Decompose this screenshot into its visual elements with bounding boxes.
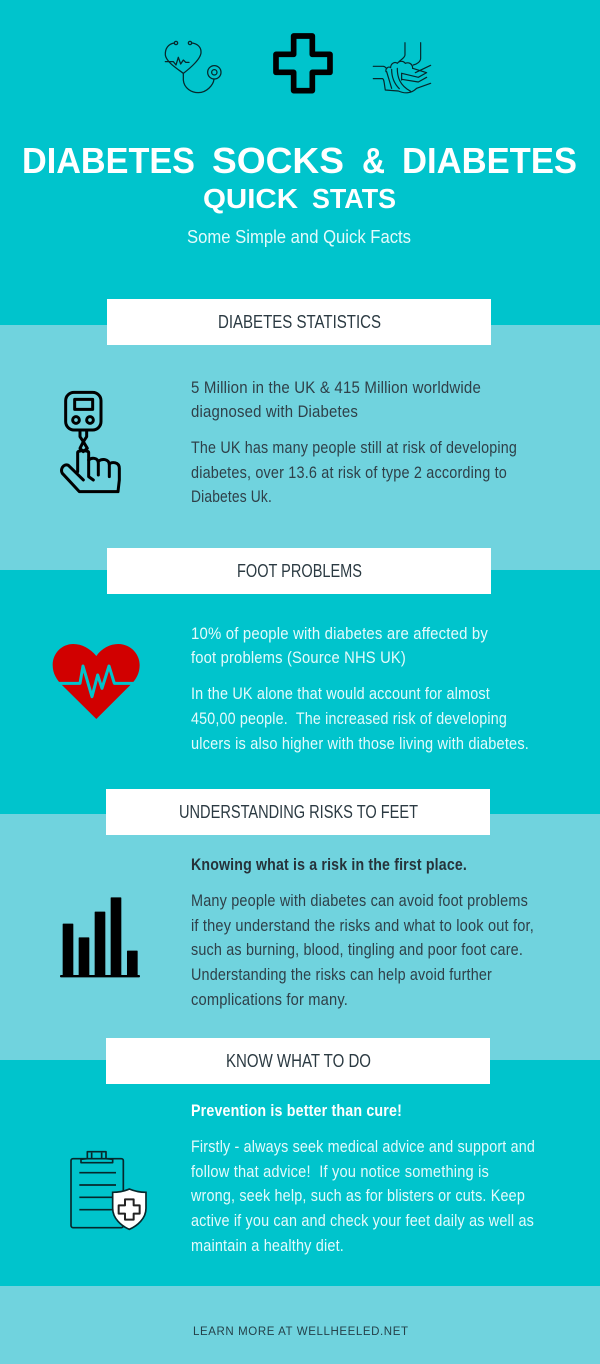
text: foot problems bbox=[191, 625, 529, 753]
title: SOCKS bbox=[212, 140, 344, 181]
heading: understanding risks: UNDERSTANDING RISKS TO FEET bbox=[179, 802, 418, 822]
text: know what to do bbox=[190, 1102, 535, 1255]
text: understanding risks: Many people with diabetes can avoid foot problems bbox=[191, 892, 528, 910]
text: foot problems: ulcers is also higher with those living with diabetes. bbox=[191, 735, 529, 753]
text: know what to do: maintain a healthy diet. bbox=[191, 1237, 344, 1255]
text: know what to do: wrong, seek help, such as for blisters or cuts. Keep bbox=[190, 1187, 525, 1205]
heading: diabetes statistics bbox=[107, 299, 491, 345]
text: understanding risks: Knowing what is a risk in the first place. bbox=[191, 856, 467, 874]
text: diabetes statistics: 5 Million in the UK & 415 Million worldwide bbox=[191, 379, 481, 397]
text: know what to do: active if you can and check your feet daily as well as bbox=[191, 1212, 534, 1230]
heading: know what to do: KNOW WHAT TO DO bbox=[226, 1051, 371, 1071]
text: know what to do: Firstly - always seek medical advice and support and bbox=[191, 1138, 535, 1156]
text: understanding risks: if they understand the risks and what to look out for, bbox=[191, 917, 534, 935]
footer: LEARN MORE AT WELLHEELED.NET bbox=[193, 1326, 408, 1338]
subtitle: QUICK bbox=[203, 183, 298, 214]
text: diabetes statistics: diagnosed with Diabetes bbox=[191, 403, 358, 421]
text: diabetes statistics: The UK has many people still at risk of developing bbox=[191, 439, 517, 457]
text: understanding risks: such as burning, blood, tingling and poor foot care. bbox=[191, 941, 523, 959]
text: foot problems: 450,00 people. The increased risk of developing bbox=[191, 710, 507, 728]
panel: know what to do bbox=[71, 1038, 535, 1255]
icon: holding hands bbox=[373, 43, 431, 93]
heading: foot problems: FOOT PROBLEMS bbox=[237, 561, 362, 581]
text: diabetes statistics: Diabetes Uk. bbox=[191, 488, 272, 506]
heading: foot problems bbox=[107, 548, 491, 594]
text: foot problems: In the UK alone that would account for almost bbox=[191, 685, 490, 703]
text: know what to do: Prevention is better than cure! bbox=[191, 1102, 402, 1120]
panel: understanding risks to feet bbox=[60, 789, 534, 1009]
title: & bbox=[362, 140, 385, 181]
icon: glucose meter and finger bbox=[62, 392, 119, 492]
subtitle: STATS bbox=[312, 183, 396, 214]
tagline: Some Simple and Quick Facts bbox=[187, 226, 411, 247]
heading: know what to do bbox=[106, 1038, 490, 1084]
heading: understanding risks bbox=[106, 789, 490, 835]
text: diabetes statistics bbox=[191, 379, 517, 506]
text: know what to do: follow that advice! If you notice something is bbox=[191, 1163, 489, 1181]
text: understanding risks: Understanding the risks can help avoid further bbox=[191, 966, 492, 984]
panel: foot problems bbox=[52, 548, 529, 753]
icon: clipboard with shield bbox=[71, 1152, 146, 1229]
text: understanding risks: complications for many. bbox=[191, 991, 348, 1009]
text: foot problems: foot problems (Source NHS UK) bbox=[191, 649, 406, 667]
title: DIABETES bbox=[402, 140, 577, 181]
title bbox=[22, 140, 577, 214]
text: foot problems: 10% of people with diabetes are affected by bbox=[191, 625, 488, 643]
title: DIABETES bbox=[22, 140, 195, 181]
heading: diabetes statistics: DIABETES STATISTICS bbox=[218, 312, 381, 332]
text: diabetes statistics: diabetes, over 13.6 at risk of type 2 according to bbox=[191, 464, 507, 482]
icon: stethoscope bbox=[165, 41, 221, 93]
subtitle bbox=[203, 183, 396, 214]
panel: diabetes statistics bbox=[62, 299, 517, 506]
icon: bar chart bbox=[60, 897, 140, 977]
text: understanding risks bbox=[191, 856, 534, 1009]
icon: heart with pulse bbox=[52, 644, 142, 719]
icon: medical cross bbox=[276, 36, 330, 91]
